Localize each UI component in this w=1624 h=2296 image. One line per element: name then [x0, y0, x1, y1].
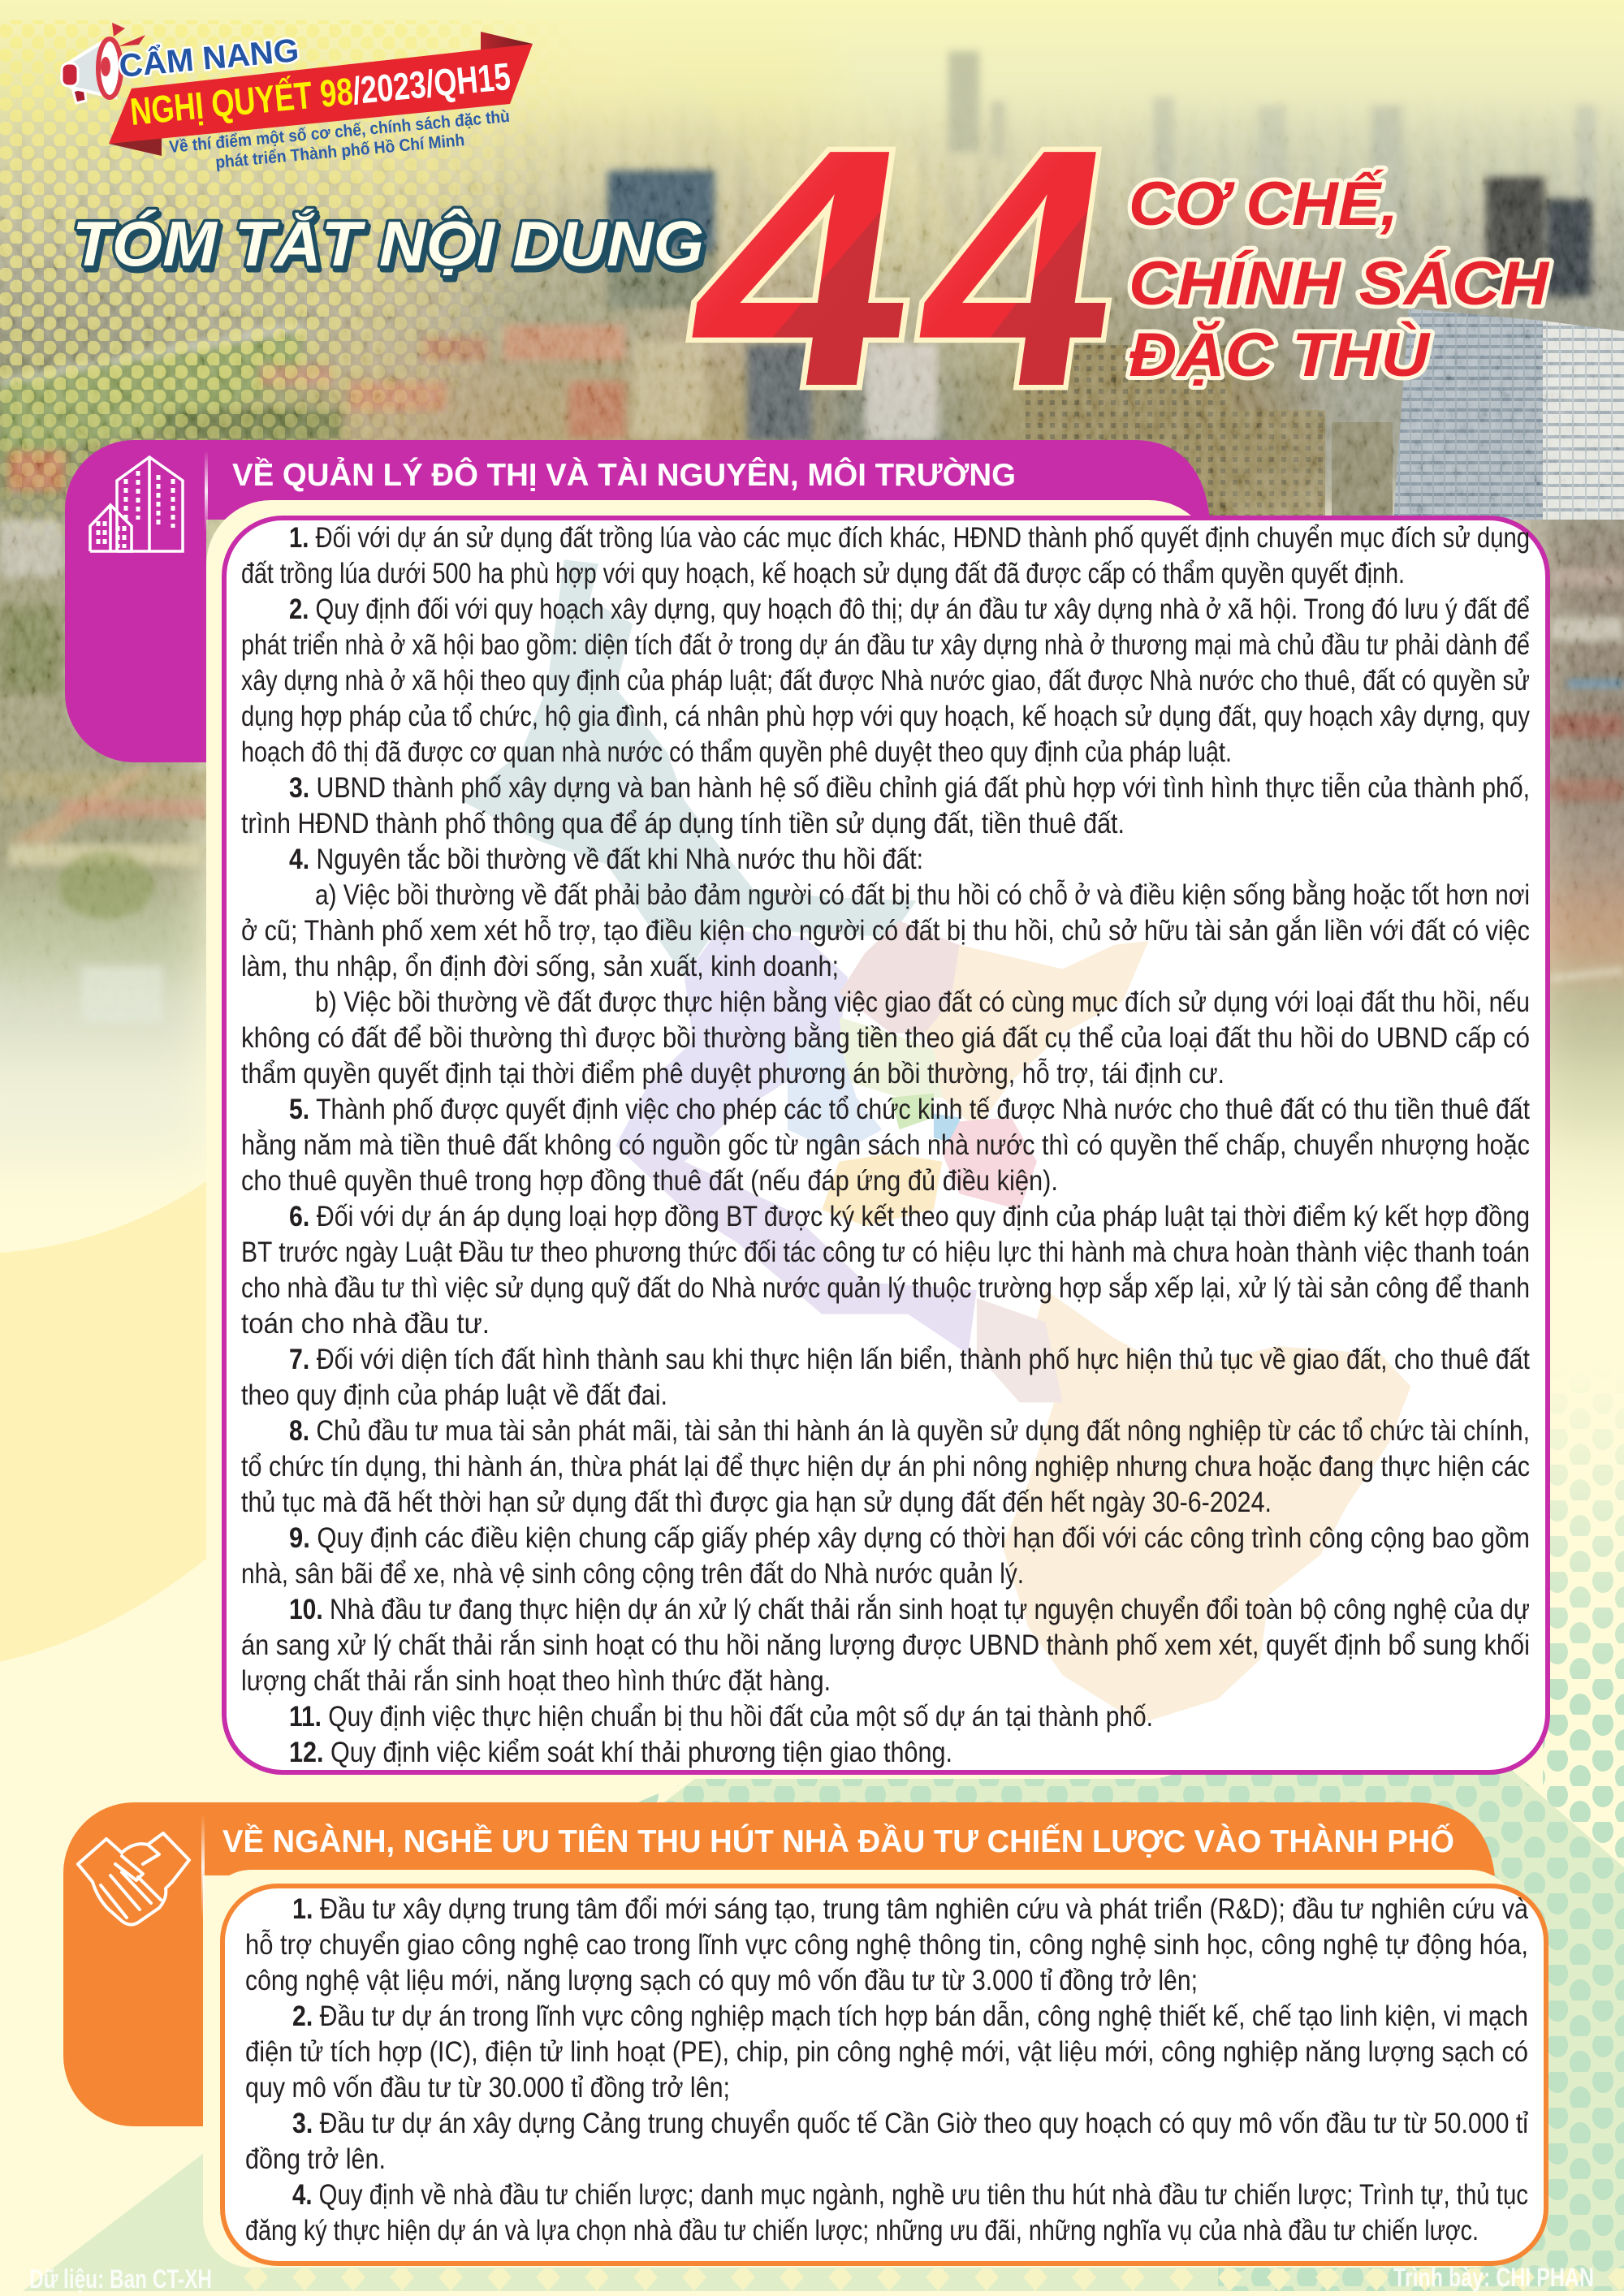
heading: Cơ chế, chính sách đặc thù: [1129, 169, 1550, 390]
body text: 12 policies: trình HĐND thành phố thông qua để áp dụng tính tiền sử dụng đất, tiền thuê đất.: [241, 808, 1125, 839]
background: blurred city aerial photo: [0, 0, 1624, 1218]
panel: ngành, nghề ưu tiên thu hút nhà đầu tư chiến lược: [63, 1802, 1546, 2268]
text: Cẩm nang: CẨM NANG: [118, 30, 300, 84]
icon: buildings: [90, 457, 183, 551]
big number 44: 4: [670, 79, 939, 457]
map of Ho Chi Minh City watermark: [461, 559, 1410, 1724]
body text: 12 policies: thủ tục mà đã hết thời hạn sử dụng đất thì được gia hạn sử dụng đất đến hết ngày 30-6-2024.: [241, 1487, 1272, 1518]
body text: 12 policies: làm, thu nhập, ổn định đời sống, sản xuất, kinh doanh;: [241, 951, 839, 982]
ribbon banner: [109, 32, 533, 156]
body text: 12 policies: thẩm quyền quyết định tại thời điểm phê duyệt phương án bồi thường, hỗ trợ, tái định cư.: [241, 1058, 1224, 1090]
logo: Cẩm nang Nghị quyết 98/2023/QH15: [62, 23, 533, 172]
body text: 12 policies: lượng chất thải rắn sinh hoạt theo hình thức đặt hàng.: [241, 1665, 831, 1697]
body text: 12 policies: 12. Quy định việc kiểm soát khí thải phương tiện giao thông.: [289, 1737, 952, 1768]
big number 44: 4: [898, 79, 1142, 457]
icon: megaphone: [62, 23, 145, 103]
panel heading: VỀ NGÀNH, NGHỀ ƯU TIÊN THU HÚT NHÀ ĐẦU TƯ CHIẾN LƯỢC VÀO THÀNH PHỐ: [222, 1823, 1454, 1859]
body text: 12 policies: toán cho nhà đầu tư.: [241, 1308, 490, 1340]
panel: quản lý đô thị và tài nguyên, môi trường: [65, 440, 1548, 1779]
background: page colour and lower decorative shapes: [0, 1181, 1624, 2291]
heading: Cơ chế, chính sách đặc thù: ĐẶC THÙ: [1129, 321, 1431, 390]
body text: 12 policies: 11. Quy định việc thực hiện chuẩn bị thu hồi đất của một số dự án tại thành phố.: [289, 1701, 1153, 1733]
body text: 4 priority sectors: [245, 1893, 1528, 2246]
body text: 12 policies: nhà, sân bãi để xe, nhà vệ sinh công cộng trên đất do Nhà nước quản lý.: [241, 1558, 1024, 1590]
body text: 12 policies: đất trồng lúa dưới 500 ha phù hợp với quy hoạch, kế hoạch sử dụng đất đã được cấp có thẩm quyền quyết định.: [241, 558, 1405, 589]
body text: 4 priority sectors: đồng trở lên.: [245, 2143, 386, 2175]
body text: 4 priority sectors: quy mô vốn đầu tư từ 30.000 tỉ đồng trở lên;: [245, 2072, 730, 2104]
text: Nghị quyết 98/2023/QH15: NGHỊ QUYẾT 98/2023/QH15: [128, 54, 512, 133]
white content card: [224, 518, 1548, 1772]
heading: Cơ chế, chính sách đặc thù: CƠ CHẾ,: [1129, 169, 1398, 239]
body text: 4 priority sectors: công nghệ vật liệu mới, năng lượng sạch có quy mô vốn đầu tư từ 3.000 tỉ đồng trở lên;: [245, 1965, 1198, 1996]
source credit: Dữ liệu: Ban CT-XH: [29, 2264, 212, 2294]
icon: handshake: [78, 1833, 189, 1925]
body text: 12 policies: [241, 522, 1530, 1768]
title: Tóm tắt nội dung: TÓM TẮT NỘI DUNG: [72, 208, 704, 279]
white content card: [222, 1886, 1546, 2264]
heading: Cơ chế, chính sách đặc thù: CHÍNH SÁCH: [1129, 249, 1550, 318]
big number 44: [670, 79, 1142, 457]
body text: 12 policies: cho thuê quyền thuê trong hợp đồng thuê đất (nếu đáp ứng đủ điều kiện).: [241, 1165, 1058, 1197]
body text: 12 policies: hoạch đô thị đã được cơ quan nhà nước có thẩm quyền phê duyệt theo quy định của pháp luật.: [241, 736, 1232, 768]
body text: 12 policies: theo quy định của pháp luật về đất đai.: [241, 1379, 667, 1411]
text: banner subtitle: [168, 107, 511, 172]
text: banner subtitle: phát triển Thành phố Hồ Chí Minh: [214, 131, 465, 172]
panel heading: VỀ QUẢN LÝ ĐÔ THỊ VÀ TÀI NGUYÊN, MÔI TRƯỜNG: [232, 456, 1016, 493]
text: banner subtitle: Về thí điểm một số cơ chế, chính sách đặc thù: [168, 107, 511, 157]
body text: 12 policies: 4. Nguyên tắc bồi thường về đất khi Nhà nước thu hồi đất:: [289, 844, 923, 875]
